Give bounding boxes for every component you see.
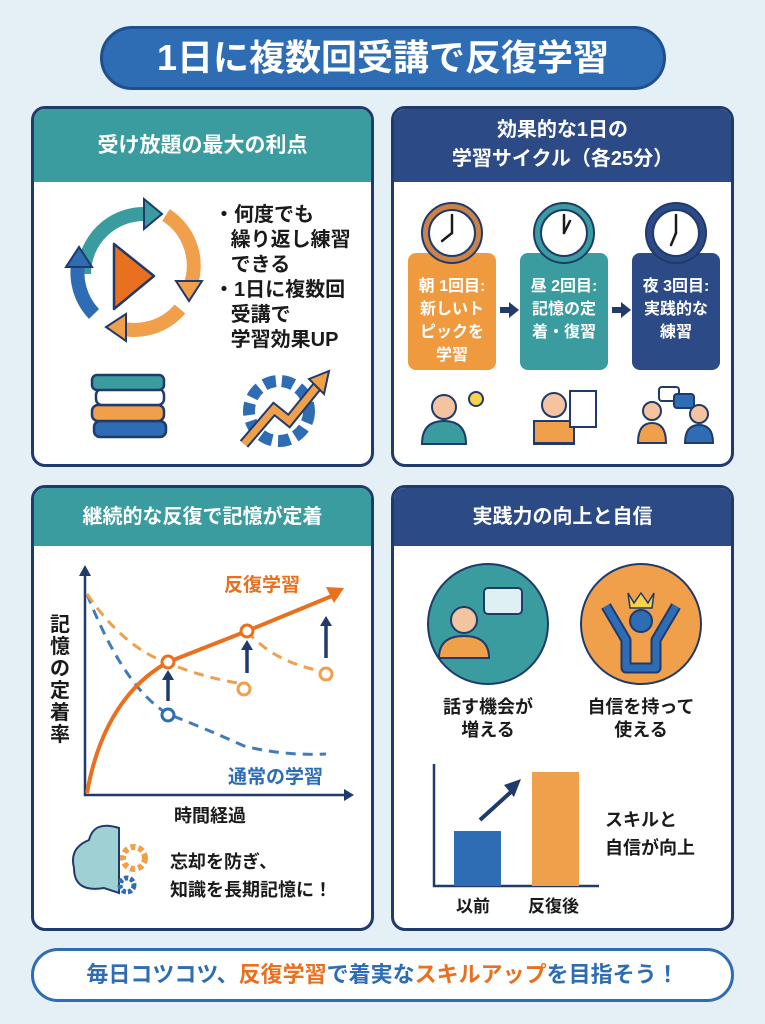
label: y axis: 記憶の定着率	[50, 614, 70, 746]
icon: brain with gears	[72, 824, 148, 894]
step: morning: ピックを	[420, 324, 484, 341]
step: noon	[520, 253, 608, 370]
text: benefit bullets: ・1日に複数回	[214, 279, 345, 301]
text: callout: 知識を長期記憶に！	[170, 880, 332, 900]
footer callout	[31, 948, 734, 1002]
step: morning: 学習	[436, 347, 468, 364]
text: benefit bullets: できる	[231, 254, 290, 276]
chart: bars	[432, 764, 599, 888]
icon: confident person	[580, 563, 702, 685]
text: confidence: 使える	[614, 720, 668, 740]
text: speaking: 話す機会が	[443, 697, 533, 717]
text: confidence	[587, 697, 695, 740]
chart: forgetting curve	[79, 565, 354, 801]
text: confidence: 自信を持って	[587, 697, 695, 717]
text: speaking	[443, 697, 533, 740]
step: morning: 朝 1回目:	[419, 278, 485, 295]
title	[100, 26, 666, 90]
heading: benefits: 受け放題の最大の利点	[98, 134, 308, 157]
label: normal learning: 通常の学習	[228, 767, 323, 788]
text: speaking: 増える	[461, 720, 515, 740]
step: noon: 昼 2回目:	[531, 278, 597, 295]
icon: books	[90, 374, 168, 438]
heading: benefits	[34, 109, 371, 182]
heading: daily cycle: 効果的な1日の	[497, 119, 628, 141]
heading: practical skills	[394, 488, 731, 546]
icon: speaking	[427, 563, 549, 685]
text: benefit bullets: 繰り返し練習	[231, 229, 351, 251]
icon: gear with rising arrow	[240, 369, 330, 448]
text: skill up: 自信が向上	[605, 838, 695, 858]
label: after: 反復後	[528, 897, 579, 916]
text: callout: 忘却を防ぎ、	[170, 852, 277, 872]
step: night: 夜 3回目:	[643, 278, 709, 295]
text: benefit bullets: ・何度でも	[214, 204, 314, 226]
text: callout	[170, 852, 332, 900]
panel: daily cycle	[391, 106, 734, 467]
step: night: 練習	[660, 324, 692, 341]
heading: daily cycle	[394, 109, 731, 182]
heading: memory retention: 継続的な反復で記憶が定着	[82, 506, 322, 528]
label: x axis: 時間経過	[174, 806, 246, 826]
panel: practical skills	[391, 485, 734, 931]
text: benefit bullets: 学習効果UP	[231, 329, 338, 351]
step: night	[632, 253, 720, 370]
text: skill up	[605, 810, 695, 858]
label: before: 以前	[456, 897, 490, 916]
step: noon: 着・復習	[532, 324, 596, 341]
text: skill up: スキルと	[605, 810, 677, 830]
title: 1日に複数回受講で反復学習	[157, 37, 609, 78]
step: morning	[408, 253, 496, 370]
icon: cycle with play	[64, 197, 204, 343]
panel: memory retention	[31, 485, 374, 931]
text: benefit bullets	[214, 204, 351, 351]
label: repeated learning: 反復学習	[224, 575, 300, 596]
heading: memory retention	[34, 488, 371, 546]
icons: clocks, arrows, people	[421, 202, 714, 445]
heading: daily cycle: 学習サイクル（各25分）	[452, 148, 673, 170]
panel: benefits	[31, 106, 374, 467]
heading: practical skills: 実践力の向上と自信	[472, 506, 652, 528]
text: benefit bullets: 受講で	[231, 304, 291, 326]
step: night: 実践的な	[644, 301, 708, 318]
step: noon: 記憶の定	[532, 301, 596, 318]
step: morning: 新しいト	[420, 301, 484, 318]
footer callout: 毎日コツコツ、反復学習で着実なスキルアップを目指そう！	[86, 962, 679, 987]
